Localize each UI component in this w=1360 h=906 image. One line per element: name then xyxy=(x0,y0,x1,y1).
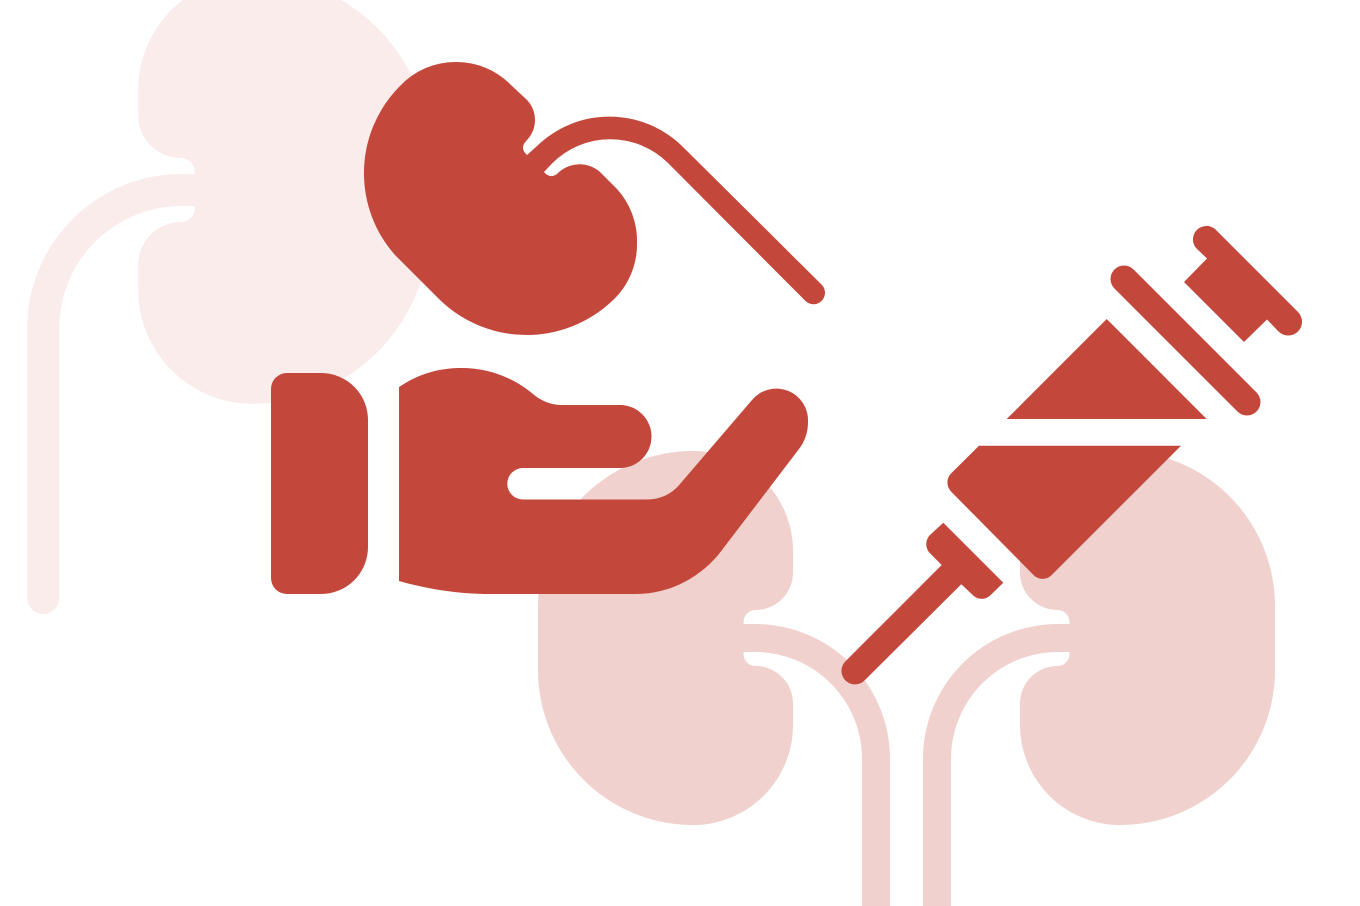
syringe: barrel lower xyxy=(947,446,1181,579)
icon: syringe xyxy=(841,226,1302,684)
syringe: plunger head xyxy=(1184,226,1302,342)
syringe: barrel upper xyxy=(1007,319,1207,419)
syringe: needle with hub xyxy=(841,523,1003,684)
icon: hand xyxy=(271,368,808,594)
hand: cuff xyxy=(271,373,368,594)
background kidney: right xyxy=(937,451,1275,906)
syringe: plunger bar xyxy=(1124,279,1247,402)
background kidney: centre xyxy=(538,451,876,906)
background kidney: top left, faint xyxy=(43,0,430,598)
icon: kidney with ureter xyxy=(364,62,825,335)
hand: palm and fingers xyxy=(399,368,808,594)
